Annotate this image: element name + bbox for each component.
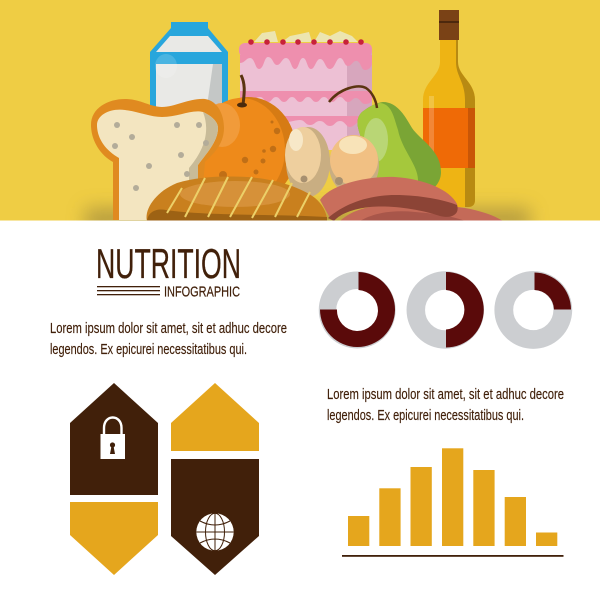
text block: right [327, 386, 564, 424]
icon: bread slice [91, 99, 224, 220]
icon: bottle [423, 10, 475, 207]
icon: globe [196, 513, 234, 551]
donut chart: 75 percent [320, 272, 395, 347]
panel: left hexagon [70, 383, 158, 575]
banner: food illustration [0, 0, 600, 232]
icon: sausages [320, 177, 503, 221]
text block: left: Lorem ipsum dolor sit amet, sit et adhuc decore [50, 320, 287, 337]
text block: left: legendos. Ex epicurei necessitatibus qui. [50, 341, 247, 358]
icon: layered cake [239, 31, 372, 150]
bar chart [342, 448, 564, 557]
donut chart: 50 percent [416, 272, 484, 348]
title [96, 240, 241, 300]
title: INFOGRAPHIC [164, 284, 240, 300]
panel: right hexagon [171, 383, 259, 575]
icon: padlock [100, 418, 125, 459]
icon: potatoes [285, 127, 379, 197]
title: NUTRITION [96, 240, 241, 287]
text block: left [50, 320, 287, 358]
donut chart: 25 percent [504, 272, 571, 340]
icon: milk carton [150, 22, 228, 107]
icon: orange [204, 74, 292, 184]
icon: pear [329, 87, 441, 200]
icon: baguette [147, 177, 327, 221]
text block: right: legendos. Ex epicurei necessitatibus qui. [327, 407, 524, 424]
